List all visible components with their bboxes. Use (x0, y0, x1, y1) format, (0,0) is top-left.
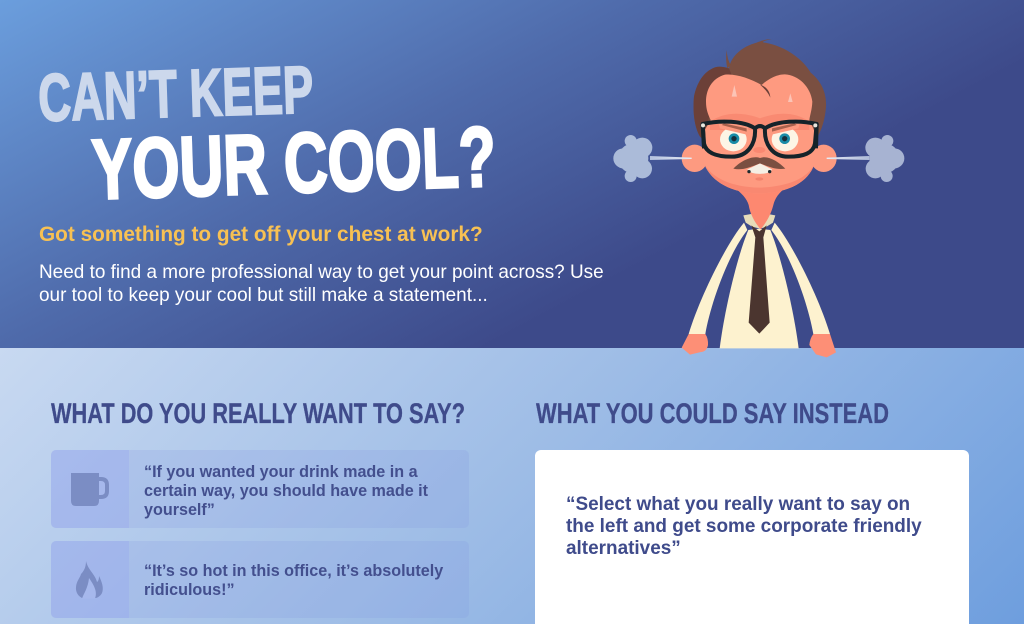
eyes (718, 123, 800, 151)
body: shirt and arms (682, 213, 836, 357)
title (37, 52, 497, 218)
quote text: yourself” (144, 501, 215, 519)
illustration: angry man (613, 39, 904, 358)
intro text: our tool to keep your cool but still make a statement... (39, 285, 488, 306)
nose (753, 147, 765, 153)
icon: flame (51, 541, 129, 618)
subheading: Got something to get off your chest at work? (39, 223, 483, 246)
panel: corporate alternatives (535, 450, 969, 624)
ears (682, 145, 708, 172)
quote text: “It’s so hot in this office, it’s absolutely (144, 562, 443, 580)
head (682, 39, 837, 229)
steam left (613, 135, 652, 182)
hero banner (0, 0, 1024, 348)
quote text: “If you wanted your drink made in a (144, 463, 418, 481)
icon: mug (51, 450, 129, 528)
neck (733, 187, 787, 229)
title: CAN’T KEEP (37, 52, 314, 136)
steam right (865, 135, 904, 182)
sweat drops (732, 85, 737, 97)
prompt text: “Select what you really want to say on (566, 494, 910, 515)
prompt text (566, 494, 922, 559)
moustache (733, 157, 785, 169)
glasses (703, 122, 817, 157)
quote text (144, 562, 444, 598)
option: drink made (51, 450, 469, 528)
face (705, 74, 814, 193)
intro text (39, 262, 604, 306)
intro text: Need to find a more professional way to get your point across? Use (39, 262, 604, 283)
quote text: certain way, you should have made it (144, 482, 428, 500)
hair (694, 39, 826, 138)
steam jets (650, 156, 869, 160)
option: hot office (51, 541, 469, 618)
prompt text: the left and get some corporate friendly (566, 516, 922, 537)
quote text: ridiculous!” (144, 580, 235, 598)
quote text (144, 463, 428, 519)
teeth (747, 163, 772, 174)
lower panel background (0, 348, 1024, 624)
prompt text: alternatives” (566, 538, 681, 559)
